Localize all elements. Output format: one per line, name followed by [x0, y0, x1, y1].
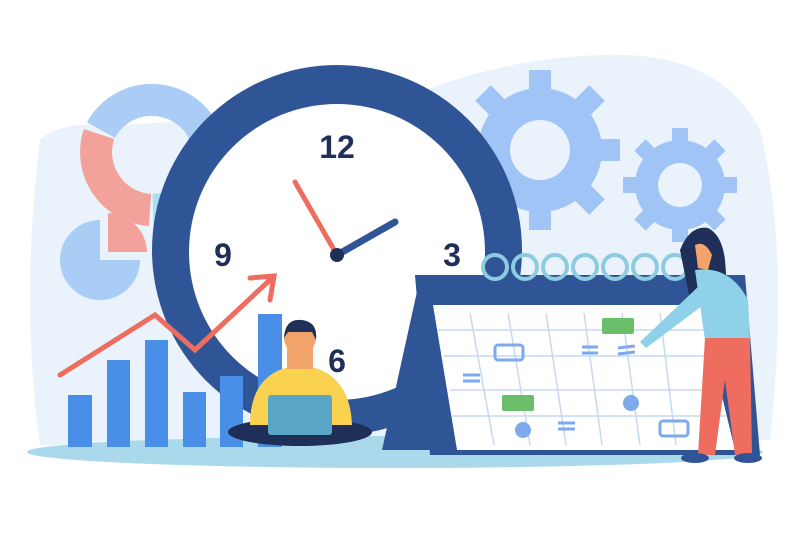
icon: gears: [460, 70, 737, 242]
arrow: growth: [60, 276, 274, 375]
icon: pie charts: [60, 100, 207, 300]
woman standing: [640, 228, 762, 463]
clock: 12: [319, 129, 355, 165]
calendar: [382, 255, 760, 455]
clock: 6: [328, 343, 346, 379]
clock: 3: [443, 237, 461, 273]
bar chart: [68, 314, 282, 447]
background blob: [30, 55, 778, 445]
clock: 9: [214, 237, 232, 273]
clock: [152, 65, 522, 435]
person sitting with laptop: [228, 320, 372, 446]
ground: [27, 436, 763, 468]
